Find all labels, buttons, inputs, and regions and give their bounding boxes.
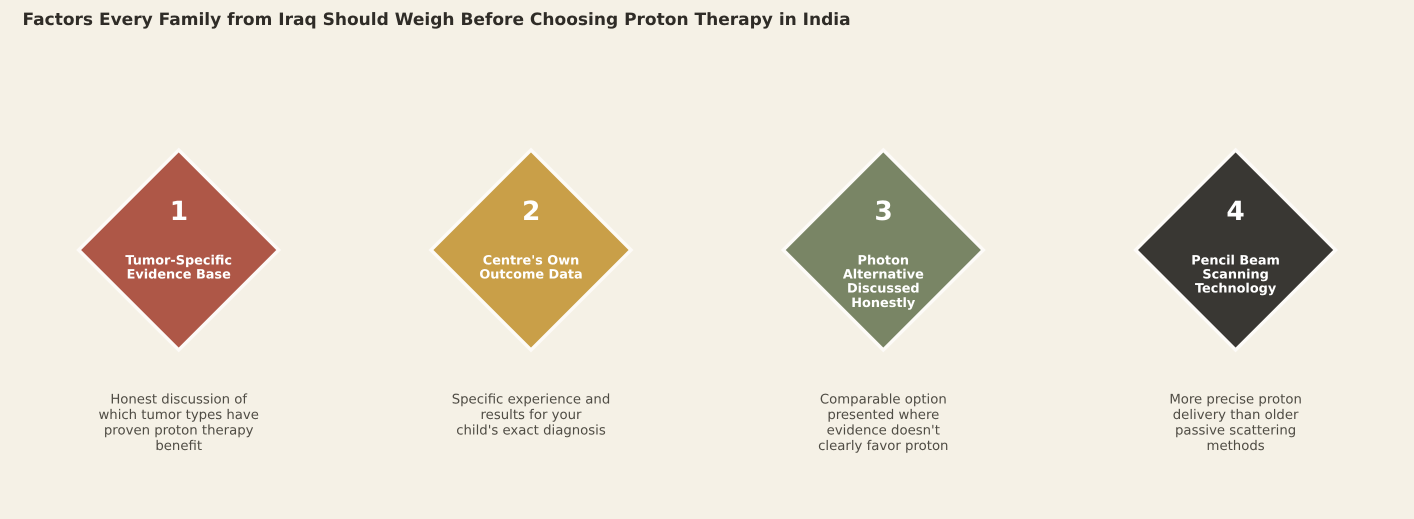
description 1: proven proton therapy <box>104 424 254 438</box>
title: Factors Every Family from Iraq Should Weigh Before Choosing Proton Therapy in India <box>22 10 851 30</box>
label 1: Tumor-Specific <box>125 253 232 268</box>
description 2: results for your <box>481 408 582 423</box>
label 4: Technology <box>1195 282 1277 297</box>
description 1: benefit <box>155 439 202 454</box>
panel: factor 4 <box>1136 150 1336 454</box>
panel: factor 2 <box>431 150 631 438</box>
label 2: Centre's Own <box>483 253 579 268</box>
description 3: evidence doesn't <box>827 424 940 438</box>
panel: factor 1 <box>79 150 279 454</box>
description 2: child's exact diagnosis <box>456 424 606 438</box>
description 3: clearly favor proton <box>818 439 948 454</box>
diamond 1 <box>79 150 279 350</box>
description 1: which tumor types have <box>98 408 259 423</box>
label 3: Honestly <box>851 296 916 311</box>
number 1: 1 <box>170 196 188 227</box>
description 4: delivery than older <box>1173 408 1299 423</box>
number 4: 4 <box>1226 196 1245 227</box>
panel: factor 3 <box>783 150 983 454</box>
label 1: Evidence Base <box>127 268 231 282</box>
description 1: Honest discussion of <box>110 392 247 407</box>
label 4: Pencil Beam <box>1191 253 1280 268</box>
diamond 3 <box>783 150 983 350</box>
label 4: Scanning <box>1202 268 1269 282</box>
description 3: presented where <box>827 408 939 423</box>
label 3: Discussed <box>847 282 920 297</box>
description 3: Comparable option <box>820 392 947 407</box>
description 2: Specific experience and <box>452 392 610 407</box>
number 3: 3 <box>874 196 893 227</box>
diamond 2 <box>431 150 631 350</box>
description 4: methods <box>1207 439 1265 454</box>
description 4: passive scattering <box>1175 424 1296 438</box>
number 2: 2 <box>522 196 540 227</box>
description 4: More precise proton <box>1169 392 1302 407</box>
label 3: Photon <box>858 253 909 268</box>
diamond 4 <box>1136 150 1336 350</box>
label 3: Alternative <box>843 268 924 282</box>
label 2: Outcome Data <box>479 268 583 282</box>
